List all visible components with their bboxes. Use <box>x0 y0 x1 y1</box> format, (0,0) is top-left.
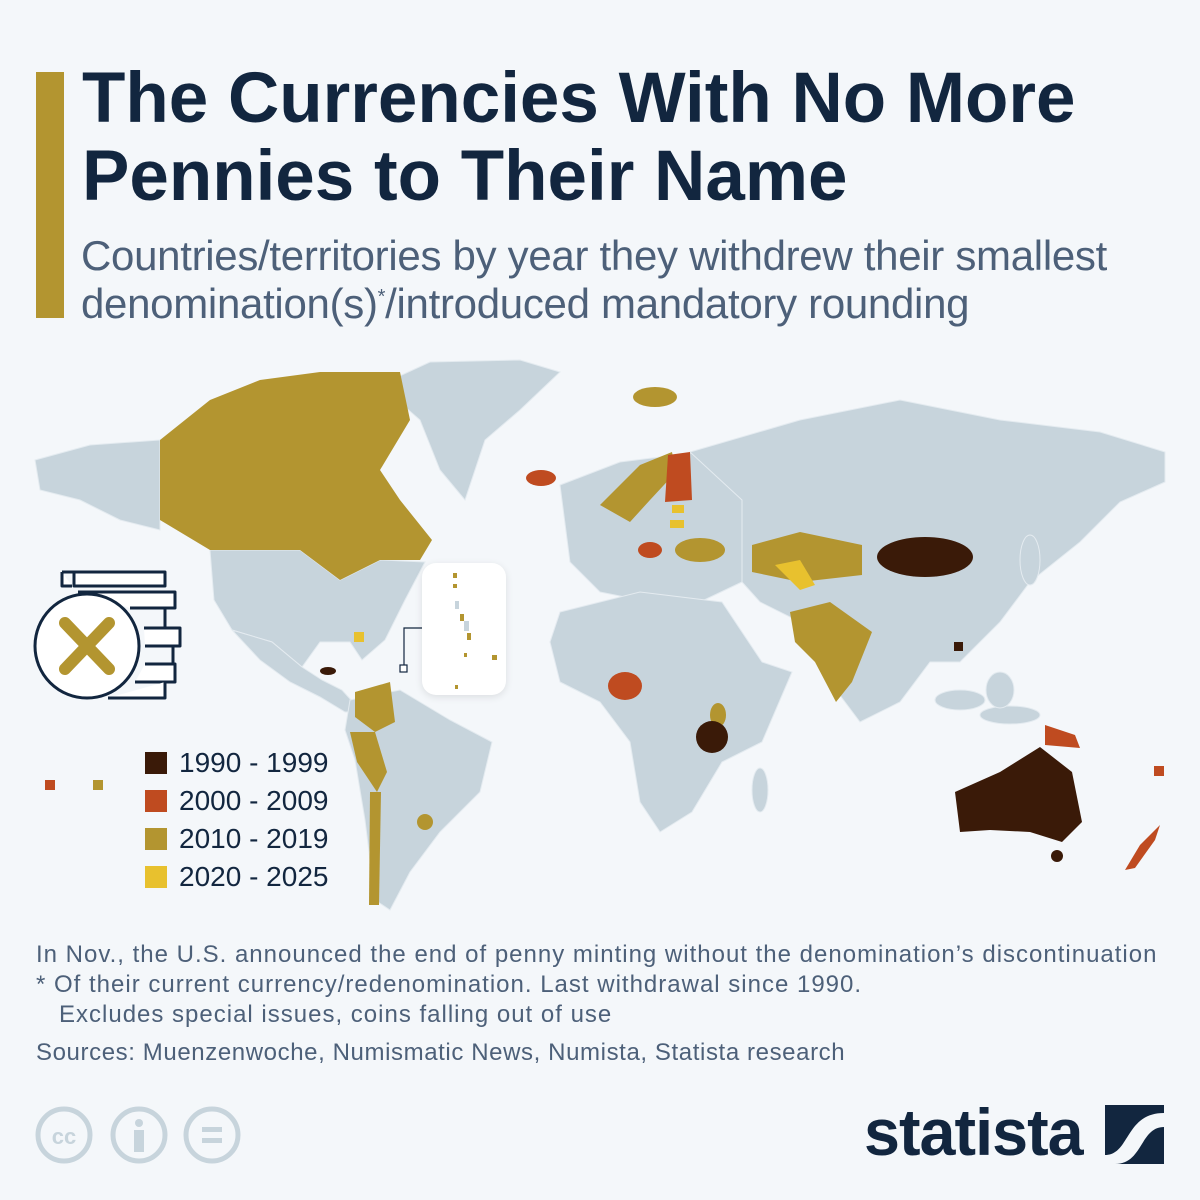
subtitle: Countries/territories by year they withdrew their smallest <box>81 232 1107 279</box>
legend: 2020 - 2025 <box>179 861 328 892</box>
subtitle: denomination(s)*/introduced mandatory rounding <box>81 280 969 327</box>
legend: 2000 - 2009 <box>179 785 328 816</box>
inset: Caribbean islands <box>422 563 506 695</box>
icon: coin stack with X <box>34 570 182 700</box>
legend <box>145 747 328 892</box>
logo: statista: statista <box>864 1095 1083 1169</box>
legend: 1990 - 1999 <box>179 747 328 778</box>
subtitle <box>81 232 1107 327</box>
license icons <box>36 1106 240 1164</box>
footnotes <box>36 941 1157 1028</box>
sources: Sources: Muenzenwoche, Numismatic News, Numista, Statista research <box>36 1039 845 1066</box>
title <box>82 59 1075 216</box>
accent bar <box>36 72 64 318</box>
title: The Currencies With No More <box>82 59 1075 138</box>
license icons: cc <box>52 1124 76 1149</box>
title: Pennies to Their Name <box>82 137 847 216</box>
footnotes: * Of their current currency/redenomination. Last withdrawal since 1990. <box>36 971 862 998</box>
legend: 2010 - 2019 <box>179 823 328 854</box>
footnotes: In Nov., the U.S. announced the end of penny minting without the denomination’s discontinuation <box>36 941 1157 968</box>
footnotes: Excludes special issues, coins falling out of use <box>59 1001 612 1028</box>
